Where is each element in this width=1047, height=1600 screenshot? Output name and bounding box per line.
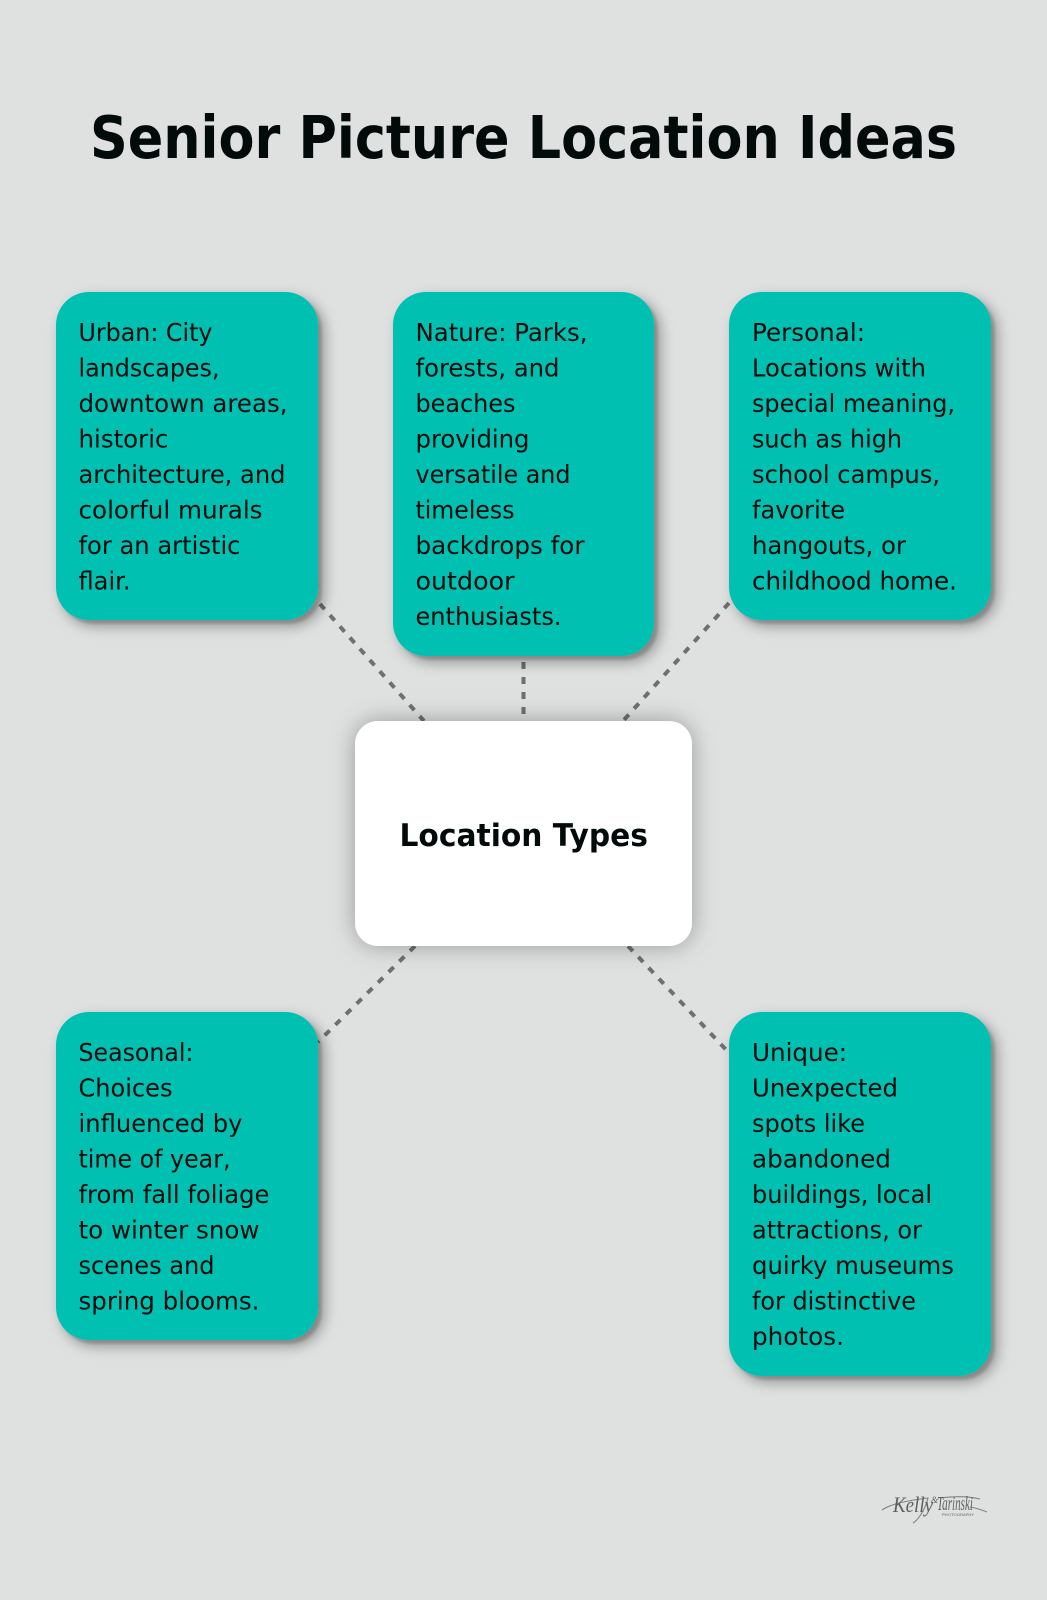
panel: unique [729,1012,991,1376]
signature logo: Tarinski [937,1493,973,1515]
signature logo [882,1492,987,1523]
panel: unique: Unexpected [752,1074,898,1102]
dashed connectors [318,603,732,1056]
connector: unique [628,946,732,1056]
panel: nature [393,292,654,656]
panel: nature: enthusiasts. [416,602,562,631]
panel: seasonal: time of year, [78,1144,230,1174]
panel: personal: childhood home. [752,566,957,596]
connector: personal [623,603,729,721]
panel: seasonal: from fall foliage [78,1180,270,1209]
panel: seasonal [56,1012,318,1340]
connector: seasonal [318,946,415,1042]
panel: unique: photos. [752,1322,844,1351]
panel: seasonal: Seasonal: [78,1038,194,1067]
panel: unique: Unique: [752,1038,847,1067]
panel: unique: buildings, local [752,1180,932,1209]
signature logo: & [931,1495,938,1505]
panel: personal [729,292,991,620]
panel: center location types: Location Types [400,818,648,854]
panel: urban: historic [78,424,168,454]
panel: urban: architecture, and [78,460,286,489]
panel: unique: quirky museums [752,1251,954,1280]
panel: urban [56,292,318,620]
panel: personal: Personal: [752,318,865,347]
connector: urban [320,604,424,721]
panel: personal: favorite [752,496,845,524]
panel: urban: downtown areas, [78,389,288,418]
panel: seasonal: to winter snow [78,1216,260,1244]
panel: unique: attractions, or [752,1216,923,1244]
panel: unique: abandoned [752,1144,891,1174]
panel: personal: hangouts, or [752,531,907,560]
signature logo: PHOTOGRAPHY [942,1513,975,1517]
panel: center location types [355,721,692,946]
panel: personal: such as high [752,424,902,454]
panel: nature: versatile and [416,460,570,489]
panel: urban: Urban: City [78,318,213,347]
panel: unique: for distinctive [752,1286,916,1316]
panel: urban: flair. [78,566,130,596]
panel: nature: forests, and [416,354,560,382]
panel: seasonal: scenes and [78,1251,214,1280]
panel: nature: providing [416,424,530,454]
panel: seasonal: Choices [78,1074,172,1102]
panel: seasonal: spring blooms. [78,1286,260,1316]
panel: personal: special meaning, [752,389,955,418]
panel: seasonal: influenced by [78,1109,243,1138]
panel: nature: timeless [416,496,514,524]
panel: personal: school campus, [752,460,940,489]
signature logo: Kelly [892,1492,933,1517]
panel: urban: colorful murals [78,496,262,524]
panel: nature: outdoor [416,566,515,596]
connector: nature [522,662,526,714]
panel: urban: for an artistic [78,531,240,560]
panel: nature: backdrops for [416,531,585,560]
title: Senior Picture Location Ideas [90,103,957,172]
panel: personal: Locations with [752,354,926,382]
panel: unique: spots like [752,1109,865,1138]
panel: nature: Nature: Parks, [416,318,588,347]
panel: nature: beaches [416,389,516,418]
panel: urban: landscapes, [78,354,220,382]
